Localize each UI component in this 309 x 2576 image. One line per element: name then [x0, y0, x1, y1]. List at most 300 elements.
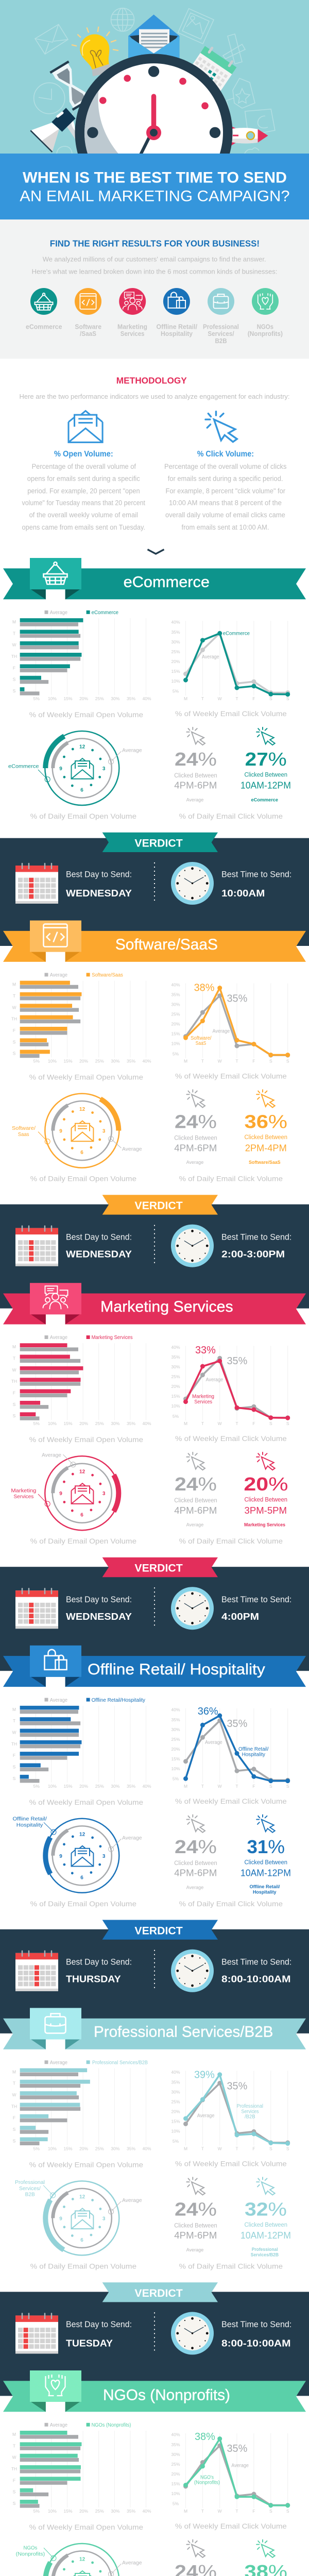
bar chart: weekly email open volume: 20% — [79, 1059, 89, 1064]
line chart: weekly email click volume — [171, 2431, 289, 2530]
line chart: weekly email click volume: T — [235, 2509, 238, 2514]
stat: daily click volume: Clicked Between — [174, 1136, 217, 1142]
line chart: weekly email click volume: Average — [231, 2463, 249, 2469]
clock chart: daily email open volume: Average — [122, 1146, 142, 1153]
panel: NGOs (Nonprofits) section — [0, 2370, 309, 2576]
panel: verdict Offline Retail/Hospitality — [0, 1920, 309, 2033]
bar chart: weekly email open volume: T — [13, 631, 15, 636]
line chart: weekly email click volume: % of Weekly Email Click Volume — [175, 2159, 287, 2167]
panel: verdict Offline Retail/Hospitality: Best Day to Send: — [66, 1958, 132, 1967]
line chart: weekly email click volume: 30% — [171, 2089, 180, 2094]
icon: wall calendar — [179, 43, 238, 106]
clock chart: daily email open volume: NGOs — [24, 2545, 37, 2551]
stat: daily click volume: 24% — [175, 1836, 217, 1857]
line chart: weekly email click volume: S — [269, 1421, 272, 1426]
line chart: weekly email click volume: T — [201, 2509, 204, 2514]
panel: Professional Services/B2B section — [0, 2008, 309, 2396]
line chart: weekly email click volume: 10% — [171, 1403, 180, 1409]
bar chart: weekly email open volume: Average — [50, 1698, 67, 1703]
panel: Marketing Services section — [0, 1283, 309, 1671]
line chart: weekly email click volume: W — [218, 1784, 222, 1789]
line chart: weekly email click volume: S — [286, 2509, 289, 2514]
panel: Software/SaaS section — [0, 921, 309, 1309]
line chart: weekly email click volume: 20% — [171, 2471, 180, 2477]
line chart: weekly email click volume: % of Weekly Email Click Volume — [175, 1072, 287, 1080]
bar chart: weekly email open volume: 40% — [143, 696, 151, 701]
bar chart: weekly email open volume: S — [13, 2501, 16, 2506]
bar chart: weekly email open volume: 40% — [143, 2146, 151, 2151]
bar chart: weekly email open volume: 30% — [111, 1421, 120, 1426]
industry labels: Marketing — [117, 323, 147, 331]
click volume definition: % Click Volume: — [197, 450, 254, 459]
stat: daily click volume — [174, 2540, 287, 2576]
clock chart: daily email open volume: 12 — [79, 2556, 85, 2563]
bar chart: weekly email open volume: S — [13, 1402, 16, 1407]
stat: daily click volume: 4PM-6PM — [174, 1505, 217, 1516]
line chart: weekly email click volume: 35% — [171, 2442, 180, 2447]
clock chart: daily email open volume: Saas — [18, 1131, 29, 1138]
line chart: weekly email click volume: T — [235, 1784, 238, 1789]
bar chart: weekly email open volume: S — [13, 2127, 16, 2132]
stat: daily click volume: 24% — [175, 2198, 217, 2219]
bar chart: weekly email open volume: 15% — [63, 2146, 73, 2151]
stat: daily click volume: Hospitality — [253, 1890, 277, 1895]
bar chart: weekly email open volume: S — [13, 677, 16, 682]
stat: daily click volume: Clicked Between — [174, 2223, 217, 2229]
bar chart: weekly email open volume: TH — [11, 2104, 17, 2109]
intro text: We analyzed millions of our customers' email campaigns to find the answer. — [43, 256, 266, 263]
decorative outline icons — [34, 8, 275, 154]
clock chart: daily email open volume — [8, 731, 142, 820]
bar chart: weekly email open volume: Software/Saas — [92, 973, 123, 978]
clock chart: daily email open volume: 6 — [80, 1875, 83, 1880]
clock chart: daily email open volume: 6 — [80, 1150, 83, 1156]
panel: verdict Software/SaaS: VERDICT — [134, 1200, 183, 1212]
bar chart: weekly email open volume: 25% — [95, 1421, 104, 1426]
clock chart: daily email open volume: Average — [122, 2560, 142, 2566]
line chart: weekly email click volume: T — [235, 1059, 238, 1064]
icon: hourglass — [49, 60, 92, 111]
line chart: weekly email click volume: Average — [197, 2113, 215, 2119]
line chart: weekly email click volume: F — [252, 1784, 255, 1789]
line chart: weekly email click volume: 25% — [171, 2099, 180, 2104]
stat: daily click volume: 24% — [175, 1111, 217, 1132]
line chart: weekly email click volume: T — [235, 696, 238, 701]
bar chart: weekly email open volume: Offline Retail/Hospitality — [92, 1698, 145, 1703]
stat: daily click volume: Clicked Between — [244, 1134, 287, 1141]
panel: verdict eCommerce — [0, 833, 309, 946]
bar chart: weekly email open volume: W — [12, 2455, 16, 2460]
clock chart: daily email open volume: Professional — [15, 2179, 45, 2185]
bar chart: weekly email open volume: 20% — [79, 696, 89, 701]
line chart: weekly email click volume: Services — [241, 2109, 259, 2114]
icon: click cursor — [205, 412, 237, 442]
bar chart: weekly email open volume: TH — [11, 2466, 17, 2471]
line chart: weekly email click volume: S — [286, 1059, 289, 1064]
line chart: weekly email click volume: 30% — [171, 1364, 180, 1369]
line chart: weekly email click volume: Software/ — [191, 1036, 212, 1041]
clock chart: daily email open volume: % of Daily Email Open Volume — [30, 2262, 136, 2270]
icon: eCommerce — [30, 288, 57, 315]
panel: verdict eCommerce: Best Day to Send: — [66, 870, 132, 879]
line chart: weekly email click volume: S — [269, 2146, 272, 2151]
intro text: Here's what we learned broken down into the 6 most common kinds of businesses: — [32, 268, 277, 275]
bar chart: weekly email open volume: 35% — [127, 2509, 135, 2514]
clock chart: daily email open volume — [12, 1816, 142, 1908]
line chart: weekly email click volume: 15% — [171, 2481, 180, 2486]
line chart: weekly email click volume — [171, 1706, 289, 1805]
line chart: weekly email click volume: S — [286, 1784, 289, 1789]
line chart: weekly email click volume: W — [218, 696, 222, 701]
bar chart: weekly email open volume: TH — [11, 1016, 17, 1022]
clock chart: daily email open volume: 3 — [102, 2216, 106, 2222]
line chart: weekly email click volume: M — [184, 1421, 187, 1426]
bar chart: weekly email open volume: W — [12, 1367, 16, 1372]
clock chart: daily email open volume: Average — [122, 1835, 142, 1841]
bar chart: weekly email open volume: 15% — [63, 2509, 73, 2514]
ribbon: Software/SaaS — [3, 921, 306, 962]
icon: NGOs — [252, 288, 279, 315]
line chart: weekly email click volume: 35% — [227, 1718, 248, 1730]
line chart: weekly email click volume: 30% — [171, 639, 180, 645]
stat: daily click volume: 2PM-4PM — [245, 1142, 287, 1153]
line chart: weekly email click volume: 20% — [171, 2109, 180, 2114]
stat: daily click volume: Services/B2B — [251, 2252, 279, 2258]
bar chart: weekly email open volume: Average — [50, 2060, 67, 2065]
industry labels: /SaaS — [80, 330, 96, 337]
stat: daily click volume: Average — [186, 2247, 203, 2253]
clock chart: daily email open volume: Average — [42, 1452, 61, 1459]
line chart: weekly email click volume: 20% — [171, 659, 180, 664]
line chart: weekly email click volume: M — [184, 1059, 187, 1064]
line chart: weekly email click volume: S — [286, 2146, 289, 2151]
panel: verdict Offline Retail/Hospitality: 8:00-10:00AM — [221, 1973, 290, 1985]
bar chart: weekly email open volume — [11, 973, 151, 1081]
ribbon: Professional Services/B2B: Professional Services/B2B — [94, 2023, 273, 2040]
intro heading: FIND THE RIGHT RESULTS FOR YOUR BUSINESS! — [50, 238, 260, 248]
open volume definition: opens came from emails sent on Tuesday. — [22, 523, 145, 531]
line chart: weekly email click volume: 10% — [171, 2128, 180, 2133]
icon: Software/SaaS — [75, 288, 101, 315]
stat: daily click volume: Professional — [252, 2247, 278, 2252]
bar chart: weekly email open volume: 35% — [127, 2146, 135, 2151]
clock chart: daily email open volume: 9 — [59, 2216, 62, 2222]
line chart: weekly email click volume: 20% — [171, 1022, 180, 1027]
clock chart: daily email open volume: 3 — [102, 1129, 106, 1134]
bar chart: weekly email open volume: 25% — [95, 2509, 104, 2514]
line chart: weekly email click volume: 40% — [171, 1345, 180, 1350]
stat: daily click volume — [174, 1090, 287, 1183]
line chart: weekly email click volume: Marketing — [192, 1394, 214, 1400]
line chart: weekly email click volume: S — [269, 1059, 272, 1064]
line chart: weekly email click volume: 5% — [173, 2501, 179, 2506]
line chart: weekly email click volume: 5% — [173, 689, 179, 694]
line chart: weekly email click volume: M — [184, 1784, 187, 1789]
stat: daily click volume: 32% — [245, 2198, 287, 2219]
clock chart: daily email open volume: 9 — [59, 1491, 62, 1497]
bar chart: weekly email open volume: Average — [50, 2422, 67, 2428]
line chart: weekly email click volume: 15% — [171, 2119, 180, 2124]
line chart: weekly email click volume: 25% — [171, 2462, 180, 2467]
icon: light bulb — [72, 27, 118, 76]
industry labels: (Nonprofits) — [248, 330, 283, 337]
stat: daily click volume — [174, 1452, 288, 1545]
stat: daily click volume: Average — [186, 1160, 203, 1165]
bar chart: weekly email open volume: 5% — [33, 1421, 40, 1426]
line chart: weekly email click volume: 20% — [171, 1747, 180, 1752]
bar chart: weekly email open volume: F — [13, 1753, 15, 1758]
title banner — [0, 154, 309, 219]
bar chart: weekly email open volume: 5% — [33, 1059, 40, 1064]
panel: verdict Software/SaaS: Best Day to Send: — [66, 1232, 132, 1242]
intro text — [32, 256, 277, 275]
stat: daily click volume: 3PM-5PM — [244, 1505, 287, 1516]
stat: daily click volume: eCommerce — [251, 798, 278, 803]
line chart: weekly email click volume: W — [218, 1059, 222, 1064]
bar chart: weekly email open volume: 20% — [79, 2146, 89, 2151]
ribbon: NGOs (Nonprofits) — [3, 2370, 306, 2412]
clock chart: daily email open volume: 12 — [79, 1832, 85, 1837]
bar chart: weekly email open volume: S — [13, 1764, 16, 1769]
bar chart: weekly email open volume: 25% — [95, 1784, 104, 1789]
panel: methodology — [20, 375, 289, 554]
bar chart: weekly email open volume: 10% — [48, 1421, 57, 1426]
bar chart: weekly email open volume: 40% — [143, 1784, 151, 1789]
line chart: weekly email click volume: Average — [202, 654, 219, 660]
click volume definition — [164, 450, 287, 531]
bar chart: weekly email open volume: M — [12, 1344, 16, 1349]
bar chart: weekly email open volume: S — [13, 2489, 16, 2495]
bar chart: weekly email open volume: NGOs (Nonprofits) — [92, 2422, 131, 2428]
line chart: weekly email click volume: T — [201, 696, 204, 701]
bar chart: weekly email open volume: 15% — [63, 696, 73, 701]
ribbon: NGOs (Nonprofits): NGOs (Nonprofits) — [103, 2386, 230, 2404]
click volume definition: for emails sent during a specific period. — [168, 475, 283, 482]
clock chart: daily email open volume: Marketing — [11, 1488, 37, 1494]
bar chart: weekly email open volume: 5% — [33, 1784, 40, 1789]
bar chart: weekly email open volume: 35% — [127, 1784, 135, 1789]
line chart: weekly email click volume: T — [201, 1421, 204, 1426]
bar chart: weekly email open volume: Average — [50, 1335, 67, 1341]
bar chart: weekly email open volume: % of Weekly Email Open Volume — [29, 2160, 143, 2168]
line chart: weekly email click volume: F — [252, 696, 255, 701]
stat: daily click volume: % of Daily Email Click Volume — [179, 1537, 283, 1545]
bar chart: weekly email open volume — [11, 1335, 151, 1444]
clock chart: daily email open volume: 3 — [102, 1854, 106, 1859]
stat: daily click volume: 27% — [245, 749, 287, 770]
bar chart: weekly email open volume: 5% — [33, 696, 40, 701]
open volume definition: volume" for Tuesday means that 20 percent — [22, 499, 145, 507]
open volume definition: % Open Volume: — [54, 450, 113, 459]
bar chart: weekly email open volume: eCommerce — [92, 610, 118, 616]
stat: daily click volume: 10AM-12PM — [241, 780, 291, 791]
bar chart: weekly email open volume: T — [13, 993, 15, 998]
ribbon: Offline Retail/Hospitality: Offline Retail/ Hospitality — [88, 1661, 265, 1678]
clock chart: daily email open volume: % of Daily Email Open Volume — [30, 1175, 136, 1183]
line chart: weekly email click volume: T — [201, 2146, 204, 2151]
line chart: weekly email click volume: 15% — [171, 1031, 180, 1037]
bar chart: weekly email open volume: 15% — [63, 1784, 73, 1789]
stat: daily click volume: 24% — [175, 749, 217, 770]
panel: intro — [0, 219, 309, 359]
bar chart: weekly email open volume: S — [13, 2138, 16, 2143]
bar chart: weekly email open volume: 10% — [48, 1784, 57, 1789]
line chart: weekly email click volume: Hospitality — [242, 1752, 265, 1757]
line chart: weekly email click volume: Professional — [237, 2104, 263, 2109]
bar chart: weekly email open volume: W — [12, 2092, 16, 2097]
bar chart: weekly email open volume: Professional Services/B2B — [92, 2060, 148, 2065]
bar chart: weekly email open volume: TH — [11, 654, 17, 659]
icon: megaphone — [30, 108, 76, 152]
panel: verdict Software/SaaS: Best Time to Send: — [221, 1232, 291, 1242]
bar chart: weekly email open volume: 10% — [48, 1059, 57, 1064]
line chart: weekly email click volume — [171, 982, 289, 1080]
bar chart: weekly email open volume: S — [13, 1413, 16, 1418]
click volume definition: from emails sent at 10:00 AM. — [181, 523, 269, 531]
line chart: weekly email click volume: S — [269, 1784, 272, 1789]
industry labels: Hospitality — [161, 330, 193, 337]
stat: daily click volume: 4PM-6PM — [174, 1142, 217, 1153]
line chart: weekly email click volume: F — [252, 1421, 255, 1426]
panel: verdict Professional Services/B2B — [0, 2282, 309, 2396]
bar chart: weekly email open volume: S — [13, 1776, 16, 1781]
panel: verdict Marketing Services: VERDICT — [134, 1563, 183, 1574]
line chart: weekly email click volume — [171, 2069, 289, 2167]
clock chart: daily email open volume: 3 — [102, 1491, 106, 1497]
ribbon: Software/SaaS: Software/SaaS — [115, 936, 218, 953]
line chart: weekly email click volume: 5% — [173, 1414, 179, 1419]
line chart: weekly email click volume: 40% — [171, 1707, 180, 1713]
clock chart: daily email open volume: 12 — [79, 2194, 85, 2200]
bar chart: weekly email open volume: 40% — [143, 1059, 151, 1064]
line chart: weekly email click volume: NGO's — [200, 2475, 214, 2480]
line chart: weekly email click volume: S — [286, 1421, 289, 1426]
ribbon: Marketing Services: Marketing Services — [100, 1298, 233, 1315]
industry labels: eCommerce — [26, 323, 62, 331]
clock chart: daily email open volume: eCommerce — [8, 764, 39, 770]
industry labels: Offline Retail/ — [157, 323, 197, 331]
stat: daily click volume: 4PM-6PM — [174, 780, 217, 791]
line chart: weekly email click volume: % of Weekly Email Click Volume — [175, 1797, 287, 1805]
stat: daily click volume: Clicked Between — [244, 2222, 287, 2228]
panel: verdict eCommerce: WEDNESDAY — [66, 888, 132, 899]
bar chart: weekly email open volume: 30% — [111, 1059, 120, 1064]
bar chart: weekly email open volume: T — [13, 2443, 15, 2448]
line chart: weekly email click volume: Average — [212, 1029, 230, 1035]
ribbon: Marketing Services — [3, 1283, 306, 1325]
bar chart: weekly email open volume: W — [12, 1730, 16, 1735]
line chart: weekly email click volume: 30% — [171, 2452, 180, 2457]
clock chart: daily email open volume: Average — [122, 2197, 142, 2204]
stat: daily click volume: 10AM-12PM — [241, 2230, 291, 2241]
line chart: weekly email click volume: 25% — [171, 1012, 180, 1017]
bar chart: weekly email open volume: 35% — [127, 1421, 135, 1426]
industry labels: NGOs — [257, 323, 273, 331]
bar chart: weekly email open volume: F — [13, 665, 15, 670]
clock chart: daily email open volume: 9 — [59, 766, 62, 772]
bar chart: weekly email open volume: W — [12, 1005, 16, 1010]
line chart: weekly email click volume: (Nonprofits) — [194, 2480, 220, 2485]
panel: verdict Offline Retail/Hospitality: Best Time to Send: — [221, 1958, 291, 1967]
panel: verdict eCommerce: VERDICT — [134, 838, 183, 849]
line chart: weekly email click volume: 5% — [173, 2139, 179, 2144]
line chart: weekly email click volume: 5% — [173, 1051, 179, 1056]
clock chart: daily email open volume: 9 — [59, 1854, 62, 1859]
bar chart: weekly email open volume: T — [13, 1718, 15, 1723]
line chart: weekly email click volume — [171, 620, 289, 718]
open volume definition: of the overall weekly volume of email — [29, 511, 138, 519]
bar chart: weekly email open volume: 30% — [111, 2146, 120, 2151]
line chart: weekly email click volume: T — [201, 1059, 204, 1064]
bar chart: weekly email open volume: F — [13, 2478, 15, 2483]
line chart: weekly email click volume: 15% — [171, 1756, 180, 1761]
methodology heading: METHODOLOGY — [116, 375, 187, 385]
panel: verdict Marketing Services — [0, 1557, 309, 1671]
bar chart: weekly email open volume: 20% — [79, 1421, 89, 1426]
clock chart: daily email open volume — [15, 2179, 142, 2270]
line chart: weekly email click volume: 38% — [194, 982, 215, 994]
line chart: weekly email click volume: % of Weekly Email Click Volume — [175, 709, 287, 718]
title line one: WHEN IS THE BEST TIME TO SEND — [23, 169, 287, 186]
stat: daily click volume: % of Daily Email Click Volume — [179, 2262, 283, 2270]
bar chart: weekly email open volume — [11, 610, 151, 719]
click volume definition: Percentage of the overall volume of clicks — [164, 463, 287, 470]
clock chart: daily email open volume: 3 — [102, 766, 106, 772]
bar chart: weekly email open volume: T — [13, 1356, 15, 1361]
arrow: chevron down — [147, 549, 164, 554]
stat: daily click volume: Average — [186, 1885, 203, 1890]
line chart: weekly email click volume: M — [184, 2146, 187, 2151]
line chart: weekly email click volume: 10% — [171, 1766, 180, 1771]
line chart: weekly email click volume: 25% — [171, 1374, 180, 1379]
line chart: weekly email click volume: 25% — [171, 1737, 180, 1742]
line chart: weekly email click volume: Offline Retail/ — [238, 1747, 269, 1752]
industry labels: Services — [121, 330, 144, 337]
bar chart: weekly email open volume: W — [12, 642, 16, 648]
icon: open envelope — [68, 411, 102, 443]
stat: daily click volume: % of Daily Email Click Volume — [179, 812, 283, 820]
bar chart: weekly email open volume: 35% — [127, 1059, 135, 1064]
bar chart: weekly email open volume: % of Weekly Email Open Volume — [29, 2523, 143, 2531]
line chart: weekly email click volume: 40% — [171, 620, 180, 625]
bar chart: weekly email open volume: 10% — [48, 696, 57, 701]
icon: Offline Retail/Hospitality — [163, 288, 190, 315]
icon: open envelope — [128, 14, 180, 59]
stat: daily click volume: Clicked Between — [174, 1498, 217, 1504]
icon: rocket — [227, 125, 268, 147]
clock chart: daily email open volume: Software/ — [12, 1125, 36, 1131]
panel: verdict Professional Services/B2B: Best Day to Send: — [66, 2320, 132, 2329]
bar chart: weekly email open volume: S — [13, 688, 16, 693]
line chart: weekly email click volume: 40% — [171, 2070, 180, 2075]
line chart: weekly email click volume: W — [218, 2509, 222, 2514]
methodology intro: Here are the two performance indicators we used to analyze engagement for each industry: — [20, 393, 289, 400]
line chart: weekly email click volume: T — [201, 1784, 204, 1789]
stat: daily click volume — [174, 2177, 291, 2270]
bar chart: weekly email open volume: Average — [50, 610, 67, 616]
clock chart: daily email open volume: 12 — [79, 1107, 85, 1112]
clock chart: daily email open volume: (Nonprofits) — [16, 2551, 45, 2557]
line chart: weekly email click volume: 10% — [171, 1041, 180, 1046]
line chart: weekly email click volume: M — [184, 696, 187, 701]
clock chart: daily email open volume: B2B — [25, 2191, 35, 2197]
bar chart: weekly email open volume — [11, 2060, 151, 2168]
stat: daily click volume: Average — [186, 798, 203, 803]
panel: verdict Offline Retail/Hospitality: THURSDAY — [66, 1973, 121, 1985]
panel: verdict Offline Retail/Hospitality: VERDICT — [134, 1925, 183, 1937]
icon: Professional Services/B2B — [208, 288, 234, 315]
bar chart: weekly email open volume: F — [13, 1390, 15, 1395]
